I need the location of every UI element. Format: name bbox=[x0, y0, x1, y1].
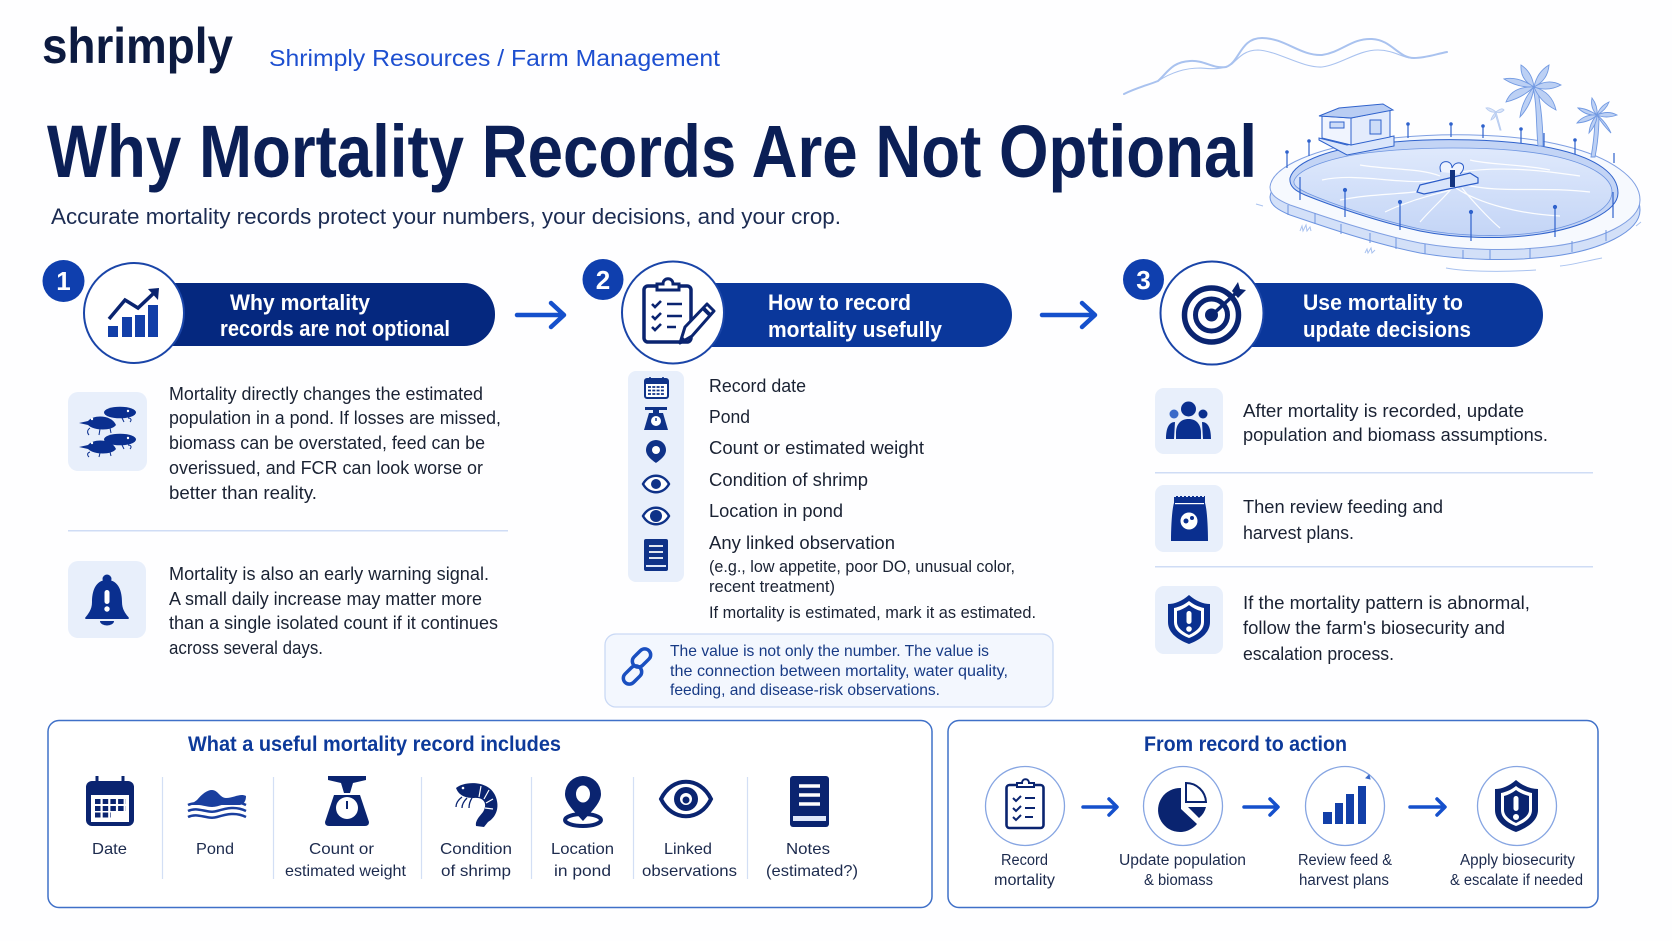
step: review plans bbox=[1298, 766, 1393, 889]
icon: location pin bbox=[565, 776, 601, 826]
logo: shrimply bbox=[42, 18, 233, 74]
panel: step 1 header bbox=[42, 260, 495, 363]
arrow 2 to 3 bbox=[1042, 303, 1095, 327]
icon: pond bbox=[188, 790, 246, 818]
callout: value of connection: the connection between mortality, water quality, bbox=[670, 663, 1008, 680]
number badge 2 bbox=[582, 259, 624, 300]
heading: From record to action bbox=[1144, 733, 1347, 756]
icon: growth chart bbox=[108, 288, 159, 337]
step: review plans: Review feed & bbox=[1298, 852, 1393, 869]
label: linked observations: observations bbox=[642, 863, 737, 880]
icon: eye small bbox=[643, 476, 669, 492]
text: abnormal pattern: follow the farm's biosecurity and bbox=[1243, 617, 1505, 638]
text: field list: Pond bbox=[709, 406, 750, 427]
fence posts bbox=[1286, 123, 1614, 241]
label: notes: Notes bbox=[786, 841, 830, 858]
label: count: Count or bbox=[309, 841, 375, 858]
icon: notes small bbox=[644, 539, 668, 571]
text: review plans: harvest plans. bbox=[1243, 522, 1354, 543]
icon: calendar bbox=[86, 776, 134, 826]
title: Why Mortality Records Are Not Optional bbox=[47, 110, 1257, 193]
step: record mortality bbox=[986, 766, 1064, 889]
callout: value of connection: The value is not only the number. The value is bbox=[670, 643, 989, 660]
text: field list: Count or estimated weight bbox=[709, 437, 924, 458]
panel: step 2 header bbox=[582, 259, 1012, 364]
subtitle: Accurate mortality records protect your numbers, your decisions, and your crop. bbox=[51, 204, 841, 229]
banner 1 bbox=[134, 283, 495, 346]
aerator bbox=[1417, 162, 1478, 194]
number badge 1 bbox=[42, 260, 84, 302]
text: early warning bbox=[169, 563, 498, 658]
icon: warning bell bbox=[68, 561, 146, 638]
text: field list: If mortality is estimated, mark it as estimated. bbox=[709, 604, 1036, 622]
label: location: Location bbox=[551, 841, 614, 858]
banner 1 text bbox=[220, 290, 450, 341]
icon strip bbox=[628, 371, 684, 582]
label: location: in pond bbox=[554, 863, 611, 880]
icon: notes bbox=[790, 776, 829, 827]
banner 3 text: Use mortality to bbox=[1303, 290, 1463, 315]
step: update population: & biomass bbox=[1144, 872, 1213, 889]
panel: how to record list bbox=[605, 371, 1053, 707]
pond water bbox=[1294, 148, 1612, 236]
icon: shrimp group bbox=[68, 392, 147, 471]
banner 3 text bbox=[1303, 290, 1471, 342]
label: count bbox=[285, 841, 407, 880]
panel: from record to action bbox=[948, 720, 1598, 908]
text: review plans bbox=[1243, 496, 1443, 543]
label: count: estimated weight bbox=[285, 863, 407, 880]
step: record mortality: Record bbox=[1001, 852, 1048, 869]
icon: clipboard and pencil bbox=[644, 279, 714, 343]
banner 1 text: Why mortality bbox=[230, 290, 371, 315]
icon: feed bag bbox=[1155, 485, 1223, 552]
illustration: shrimp pond bbox=[1124, 38, 1641, 271]
text: field list: recent treatment) bbox=[709, 578, 835, 596]
step: apply biosecurity bbox=[1450, 766, 1583, 889]
label: date: Date bbox=[92, 841, 127, 858]
banner 2 text: How to record bbox=[768, 290, 911, 315]
text: review plans: Then review feeding and bbox=[1243, 496, 1443, 517]
arrow 1 to 2 bbox=[517, 303, 564, 327]
label: condition: Condition bbox=[440, 841, 512, 858]
banner 2 bbox=[669, 283, 1012, 347]
label: pond: Pond bbox=[196, 841, 234, 858]
icon: warning shield bbox=[1155, 586, 1223, 654]
panel: use mortality bbox=[1155, 388, 1593, 664]
label: condition bbox=[440, 841, 512, 880]
number badge 3: 3 bbox=[1136, 265, 1151, 295]
text: field list: Record date bbox=[709, 375, 806, 396]
icon: target bbox=[1184, 282, 1246, 342]
palm trees bbox=[1486, 65, 1617, 157]
text: update assumptions: After mortality is recorded, update bbox=[1243, 400, 1524, 421]
heading: What a useful mortality record includes bbox=[188, 733, 561, 756]
pond wall bbox=[1270, 145, 1640, 260]
text: early warning: A small daily increase may matter more bbox=[169, 588, 482, 609]
step: update population: Update population bbox=[1119, 852, 1246, 869]
hut bbox=[1319, 104, 1394, 155]
icon circle 3 bbox=[1160, 262, 1264, 364]
step: review plans: harvest plans bbox=[1299, 872, 1389, 889]
icon: calendar small bbox=[645, 377, 668, 398]
step: apply biosecurity: Apply biosecurity bbox=[1460, 852, 1575, 869]
number badge 3 bbox=[1123, 259, 1164, 300]
label: condition: of shrimp bbox=[441, 863, 511, 880]
text: field list: Any linked observation bbox=[709, 532, 895, 553]
text: abnormal pattern: If the mortality pattern is abnormal, bbox=[1243, 592, 1530, 613]
breadcrumb: Shrimply Resources / Farm Management bbox=[269, 45, 720, 71]
icon: link bbox=[621, 646, 653, 687]
panel: why records matter bbox=[68, 383, 508, 658]
banner 3 bbox=[1207, 283, 1543, 347]
text: field list: (e.g., low appetite, poor DO, unusual color, bbox=[709, 558, 1015, 576]
text: population effect bbox=[169, 383, 501, 503]
number badge 2: 2 bbox=[596, 265, 610, 295]
panel: what a useful mortality record includes bbox=[48, 720, 932, 908]
number badge 1: 1 bbox=[56, 266, 71, 296]
label: notes: (estimated?) bbox=[766, 863, 858, 880]
step: apply biosecurity: & escalate if needed bbox=[1450, 872, 1583, 889]
text: abnormal pattern bbox=[1243, 592, 1530, 664]
label: location bbox=[551, 841, 614, 880]
icon: scale small bbox=[644, 407, 668, 430]
banner 1 text: records are not optional bbox=[220, 316, 450, 341]
text: population effect: better than reality. bbox=[169, 482, 317, 503]
label: linked observations bbox=[642, 841, 737, 880]
icon: people bbox=[1155, 388, 1223, 454]
text: field list: Condition of shrimp bbox=[709, 469, 868, 490]
text: update assumptions bbox=[1243, 400, 1548, 445]
icon circle 2 bbox=[622, 262, 724, 364]
text: population effect: population in a pond. If losses are missed, bbox=[169, 407, 501, 428]
text: field list: Location in pond bbox=[709, 500, 843, 521]
banner 2 text bbox=[768, 290, 943, 342]
text: early warning: Mortality is also an early warning signal. bbox=[169, 563, 489, 584]
banner 3 text: update decisions bbox=[1303, 317, 1471, 342]
text: early warning: than a single isolated count if it continues bbox=[169, 612, 498, 633]
step: record mortality: mortality bbox=[994, 872, 1055, 889]
text: population effect: biomass can be overstated, feed can be bbox=[169, 432, 485, 453]
banner 2 text: mortality usefully bbox=[768, 317, 943, 342]
icon: scale bbox=[325, 776, 369, 826]
label: notes bbox=[766, 841, 858, 880]
icon: shrimp bbox=[456, 783, 497, 827]
pond inner wall bbox=[1290, 140, 1618, 238]
text: population effect: Mortality directly changes the estimated bbox=[169, 383, 483, 404]
callout: value of connection: feeding, and disease-risk observations. bbox=[670, 682, 940, 699]
arrow bbox=[1244, 799, 1278, 815]
label: linked observations: Linked bbox=[664, 841, 712, 858]
step: update population bbox=[1119, 766, 1246, 889]
arrow bbox=[1083, 799, 1117, 815]
text: update assumptions: population and biomass assumptions. bbox=[1243, 424, 1548, 445]
arrow bbox=[1410, 799, 1445, 815]
panel: step 3 header bbox=[1123, 259, 1543, 364]
pond wall joints bbox=[1288, 205, 1606, 260]
icon circle 1 bbox=[84, 263, 184, 363]
text: early warning: across several days. bbox=[169, 637, 323, 658]
text: population effect: overissued, and FCR can look worse or bbox=[169, 457, 483, 478]
pond shore marks bbox=[1256, 204, 1641, 271]
icon: eye bbox=[661, 782, 711, 816]
icon: eye small filled bbox=[643, 508, 669, 524]
icon: pin small bbox=[646, 440, 666, 463]
callout: value of connection bbox=[605, 634, 1053, 707]
pond rim bbox=[1270, 135, 1640, 250]
text: abnormal pattern: escalation process. bbox=[1243, 643, 1394, 664]
text: field list bbox=[709, 375, 1036, 622]
